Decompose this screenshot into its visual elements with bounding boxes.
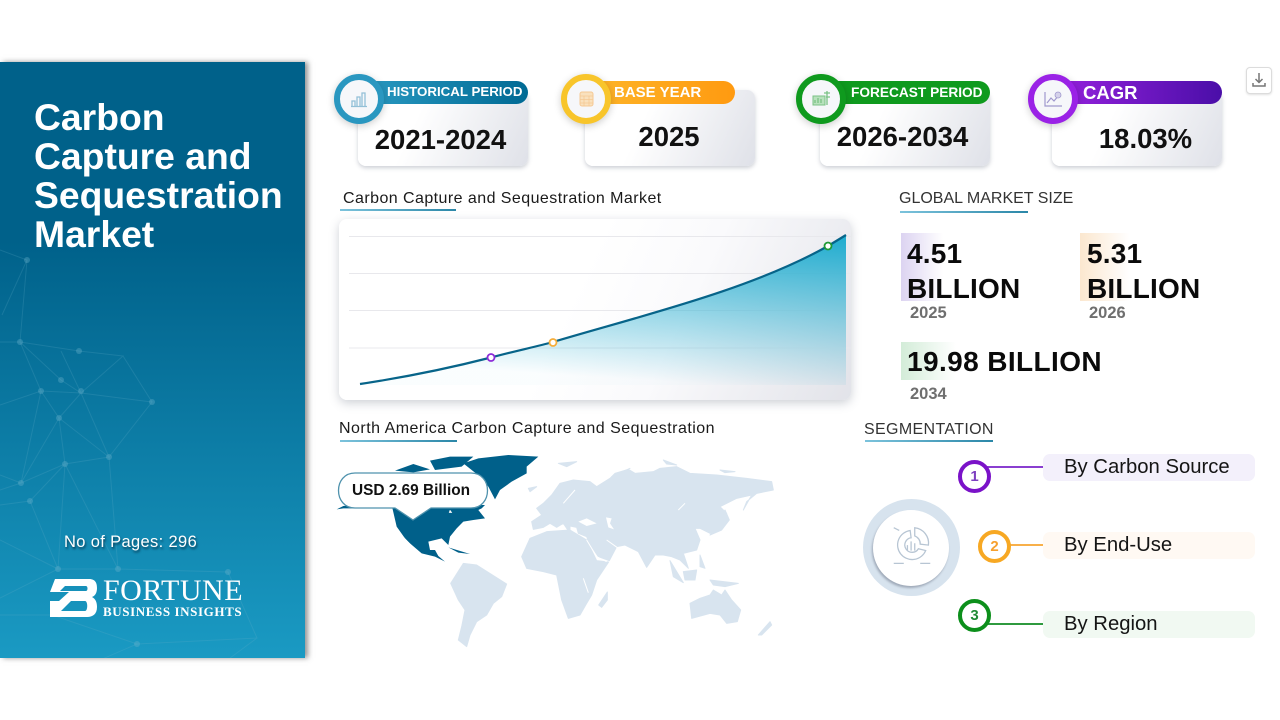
segment 3: By Region bbox=[958, 599, 1255, 638]
label: By End-Use bbox=[1064, 534, 1172, 556]
year: 2034 bbox=[910, 385, 947, 403]
label: By Carbon Source bbox=[1064, 456, 1230, 478]
card body bbox=[585, 90, 755, 166]
icon: gauge chart bbox=[894, 527, 930, 564]
heading: segmentation: SEGMENTATION bbox=[864, 421, 994, 438]
number badge bbox=[958, 599, 991, 632]
title bbox=[34, 96, 283, 255]
heading underline bbox=[865, 440, 993, 442]
left sidebar panel bbox=[0, 62, 305, 658]
title: Capture and bbox=[34, 135, 252, 177]
inner disc bbox=[873, 510, 949, 586]
title: Market bbox=[34, 213, 154, 255]
value: BILLION bbox=[1087, 273, 1200, 304]
segment 1: By Carbon Source bbox=[958, 454, 1255, 493]
metric: 2025 bbox=[901, 233, 1020, 322]
icon: download button bbox=[1246, 67, 1272, 94]
heading underline bbox=[340, 209, 456, 211]
decorative network pattern bbox=[0, 250, 258, 658]
number badge: 1 bbox=[970, 468, 979, 485]
title: Carbon bbox=[34, 96, 165, 138]
logo wordmark: FORTUNE bbox=[103, 574, 243, 607]
segmentation hub icon bbox=[863, 499, 960, 596]
pages count: No of Pages: 296 bbox=[64, 533, 197, 551]
number badge bbox=[958, 460, 991, 493]
value bbox=[1087, 238, 1200, 304]
stat card: base year bbox=[558, 72, 757, 170]
metric: 2026 bbox=[1080, 233, 1200, 322]
area chart bbox=[349, 234, 846, 386]
stat card: forecast period bbox=[792, 72, 992, 170]
card body bbox=[820, 90, 990, 166]
value: 2021-2024 bbox=[375, 124, 506, 155]
metric: 2034 bbox=[901, 342, 1102, 403]
connector bbox=[987, 623, 1044, 625]
card body bbox=[1052, 90, 1222, 166]
year: 2026 bbox=[1089, 304, 1126, 322]
number badge: 2 bbox=[990, 538, 999, 555]
value: 4.51 bbox=[907, 238, 962, 269]
tint bbox=[901, 342, 956, 380]
segment 2: By End-Use bbox=[978, 530, 1255, 563]
callout: USD 2.69 Billion bbox=[338, 472, 488, 521]
header pill bbox=[581, 81, 735, 104]
heading: market chart: Carbon Capture and Sequestration Market bbox=[343, 190, 662, 207]
stat card: historical period bbox=[330, 72, 530, 170]
title: Sequestration bbox=[34, 174, 283, 216]
heading underline bbox=[900, 211, 1028, 213]
label bbox=[1043, 454, 1255, 481]
header pill: CAGR bbox=[1083, 82, 1137, 103]
value: 19.98 BILLION bbox=[907, 346, 1102, 377]
stat card: CAGR bbox=[1024, 72, 1224, 170]
tint bbox=[1080, 233, 1130, 301]
callout bubble bbox=[338, 472, 488, 521]
value: BILLION bbox=[907, 273, 1020, 304]
card body bbox=[358, 90, 528, 166]
header pill bbox=[816, 81, 990, 104]
header pill: FORECAST PERIOD bbox=[851, 85, 983, 100]
value bbox=[907, 238, 1020, 304]
header pill: HISTORICAL PERIOD bbox=[387, 84, 522, 99]
icon ring bbox=[1028, 74, 1078, 124]
value: 2026-2034 bbox=[837, 121, 968, 152]
year: 2025 bbox=[910, 304, 947, 322]
connector bbox=[987, 466, 1044, 468]
number badge: 3 bbox=[970, 607, 979, 624]
value: 2025 bbox=[638, 121, 700, 152]
icon: FB logo mark bbox=[50, 579, 97, 617]
heading underline bbox=[340, 440, 457, 442]
logo tagline: BUSINESS INSIGHTS bbox=[103, 604, 242, 619]
header pill bbox=[1048, 81, 1222, 104]
icon ring bbox=[796, 74, 846, 124]
header pill: BASE YEAR bbox=[614, 84, 701, 101]
value: 5.31 bbox=[1087, 238, 1142, 269]
heading: global market size: GLOBAL MARKET SIZE bbox=[899, 190, 1073, 207]
header pill bbox=[354, 81, 528, 104]
label bbox=[1043, 532, 1255, 559]
value: 18.03% bbox=[1099, 123, 1192, 154]
number badge bbox=[978, 530, 1011, 563]
logo: Fortune Business Insights bbox=[50, 574, 243, 619]
icon ring bbox=[561, 74, 611, 124]
connector bbox=[1008, 544, 1044, 546]
world map bbox=[336, 455, 774, 647]
label: By Region bbox=[1064, 613, 1158, 635]
callout text: USD 2.69 Billion bbox=[352, 482, 470, 499]
icon ring bbox=[334, 74, 384, 124]
label bbox=[1043, 611, 1255, 638]
tint bbox=[901, 233, 943, 301]
area chart panel bbox=[339, 219, 851, 400]
heading: north america: North America Carbon Capture and Sequestration bbox=[339, 420, 715, 437]
